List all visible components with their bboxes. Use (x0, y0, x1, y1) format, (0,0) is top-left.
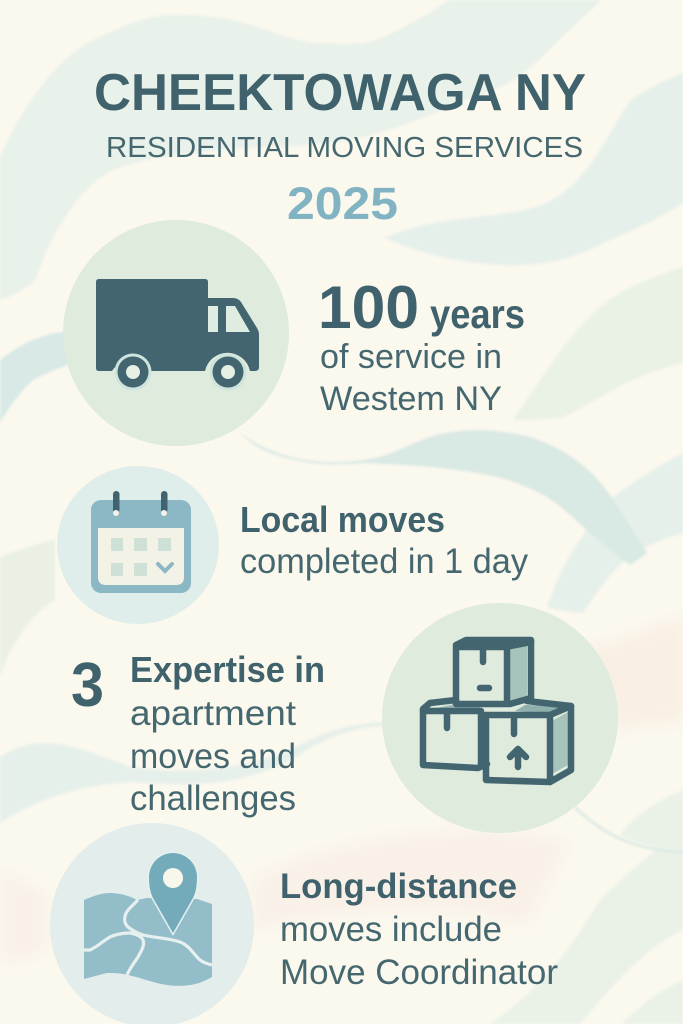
text: of service in Western NY: Westem NY (320, 380, 502, 418)
icon: stacked boxes (382, 603, 618, 833)
heading: local moves: Local moves (240, 499, 445, 540)
stat: 100 years: years (430, 291, 525, 337)
number 3: 3 (71, 651, 104, 720)
panel: long-distance moves (50, 823, 558, 1024)
heading: long-distance: Long-distance (280, 867, 517, 906)
panel: 100 years of service (63, 220, 525, 446)
year: 2025 (287, 178, 398, 229)
text: moves include Move Coordinator: Move Coordinator (280, 953, 558, 992)
icon: moving truck (63, 220, 289, 446)
title: CHEEKTOWAGA NY (94, 64, 586, 122)
panel: apartment expertise (71, 603, 618, 833)
text: apartment moves and challenges: apartment (130, 694, 296, 733)
text: apartment moves and challenges: challenges (130, 779, 296, 818)
panel: local moves (57, 466, 528, 624)
icon: map with pin (50, 823, 254, 1024)
text: of service in Western NY: of service in (320, 338, 502, 376)
text: completed in 1 day: completed in 1 day (240, 542, 528, 581)
text: moves include Move Coordinator: moves include (280, 910, 502, 949)
stat: 100 years: 100 (318, 274, 419, 341)
subtitle: RESIDENTIAL MOVING SERVICES (106, 132, 583, 164)
icon: calendar (57, 466, 219, 624)
heading: expertise in: Expertise in (130, 649, 325, 690)
text: apartment moves and challenges: moves and (130, 737, 296, 776)
